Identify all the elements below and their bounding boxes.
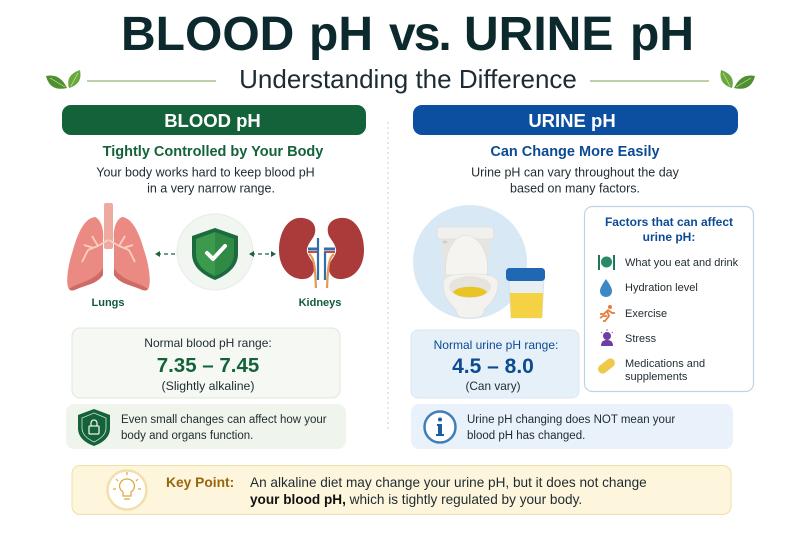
callout: blood: body and organs function.: [121, 430, 253, 442]
heading: blood: Tightly Controlled by Your Body: [103, 144, 323, 160]
factor: stress: [601, 329, 657, 346]
subtitle with leaves: [46, 64, 755, 94]
callout: urine: blood pH has changed.: [467, 430, 585, 442]
panel: blood header: [62, 105, 366, 135]
panel: factors: [584, 206, 754, 392]
factor: hydration: [600, 279, 698, 297]
factor: medications: supplements: [625, 371, 688, 383]
factor: exercise: [600, 305, 667, 321]
label: lungs: Lungs: [92, 297, 124, 309]
icon: toilet: [413, 205, 527, 319]
title: vs.: [389, 8, 450, 61]
divider: [387, 122, 389, 430]
text: blood description: [96, 166, 315, 196]
panel: key point: your blood pH, which is tightly regulated by your body.: [250, 492, 582, 507]
factor: medications: [596, 357, 705, 383]
panel: urine range: 4.5 – 8.0: [452, 355, 534, 378]
panel: blood range: Normal blood pH range:: [144, 336, 272, 350]
callout: blood: Even small changes can affect how your: [121, 414, 327, 426]
callout: urine: [411, 404, 733, 449]
icon: shield lock: [78, 409, 110, 446]
panel: urine range: [411, 330, 579, 398]
title: pH: [630, 8, 694, 61]
text: urine description: [471, 166, 680, 196]
factor: exercise: Exercise: [625, 308, 667, 320]
icon: info: [424, 412, 456, 442]
panel: key point: An alkaline diet may change your urine pH, but it does not change: [250, 475, 647, 490]
panel: blood range: (Slightly alkaline): [162, 379, 254, 393]
factor: food: What you eat and drink: [625, 257, 739, 269]
text: blood description: Your body works hard to keep blood pH: [96, 166, 315, 180]
factor: stress: Stress: [625, 333, 657, 345]
panel: factors: Factors that can affect: [605, 215, 733, 229]
title: BLOOD: [121, 8, 294, 61]
factor: hydration: Hydration level: [625, 282, 698, 294]
panel: key point: Key Point:: [166, 475, 234, 490]
factor: medications: Medications and: [625, 358, 705, 370]
icon: sample cup: [506, 268, 545, 318]
panel: factors: urine pH:: [643, 230, 695, 244]
icon: shield with check: [177, 214, 253, 290]
title: URINE: [464, 8, 613, 61]
panel: blood range: 7.35 – 7.45: [157, 354, 259, 377]
panel: urine range: Normal urine pH range:: [434, 338, 558, 352]
panel: urine range: (Can vary): [465, 379, 521, 393]
text: urine description: based on many factors.: [510, 182, 640, 196]
panel: urine header: URINE pH: [528, 110, 616, 131]
arrow: lungs to shield: [155, 251, 182, 257]
callout: urine: Urine pH changing does NOT mean your: [467, 414, 675, 426]
panel: blood header: BLOOD pH: [164, 110, 261, 131]
icon: light bulb: [108, 470, 146, 510]
subtitle with leaves: Understanding the Difference: [239, 64, 577, 94]
icon: kidneys: [279, 218, 364, 288]
text: blood description: in a very narrow range.: [147, 182, 275, 196]
heading: urine: Can Change More Easily: [490, 144, 660, 160]
icon: lungs: [67, 203, 150, 290]
panel: key point: [72, 466, 731, 514]
panel: blood range: [72, 328, 340, 398]
text: urine description: Urine pH can vary throughout the day: [471, 166, 680, 180]
factor: food: [599, 255, 739, 270]
callout: blood: [66, 404, 346, 449]
arrow: shield to kidneys: [249, 251, 276, 257]
title: pH: [309, 8, 373, 61]
panel: urine header: [413, 105, 738, 135]
label: kidneys: Kidneys: [299, 297, 341, 309]
